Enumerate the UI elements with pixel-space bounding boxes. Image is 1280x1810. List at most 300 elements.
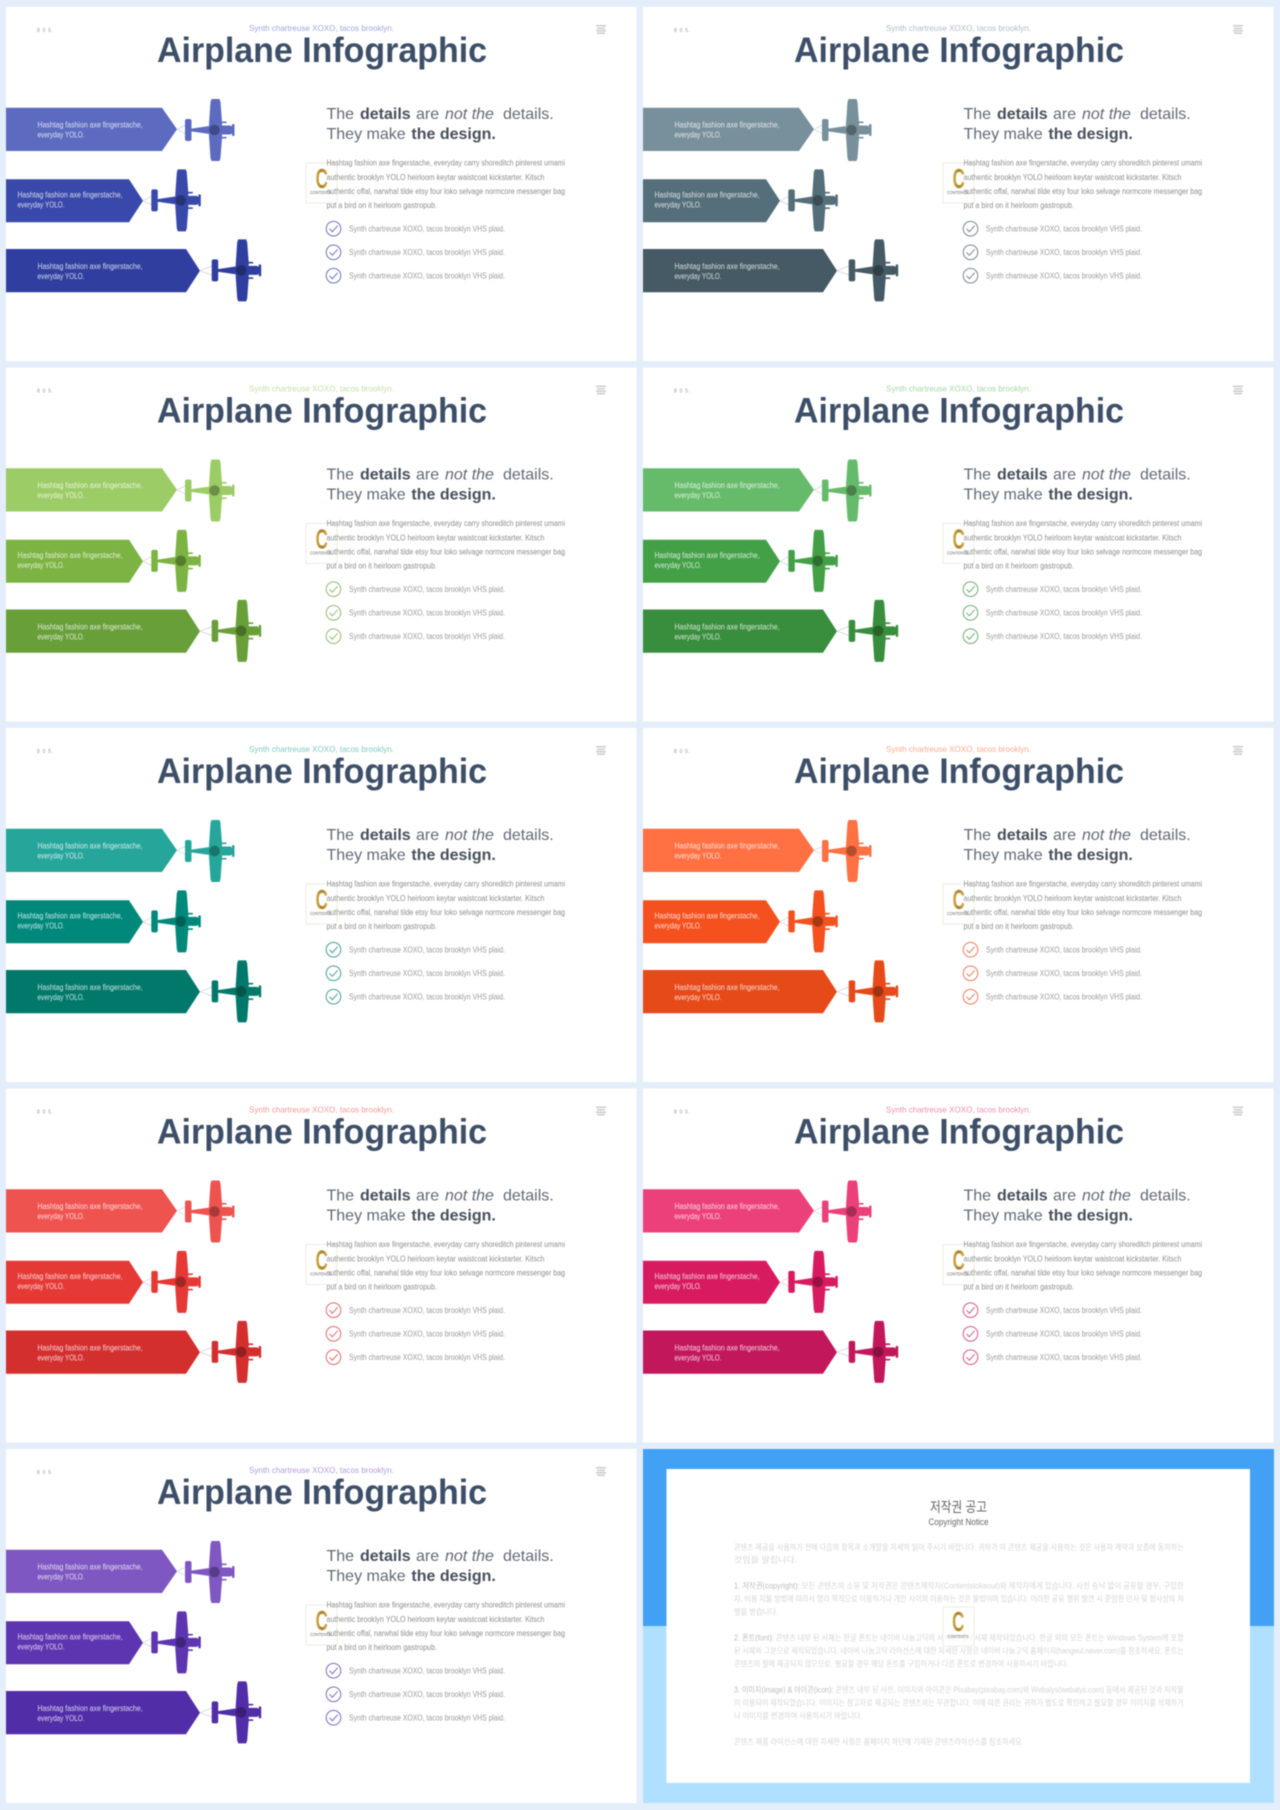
heading: the design. [1048, 1208, 1133, 1224]
banner arrow 3: everyday YOLO. [674, 272, 722, 281]
title: Airplane Infographic [794, 392, 1124, 430]
banner arrow 2: everyday YOLO. [18, 1282, 64, 1291]
watermark: C [952, 1244, 965, 1276]
banner arrow 2 [6, 540, 143, 583]
panel: copyright notice [643, 1449, 1274, 1803]
heading: not the [1082, 106, 1131, 123]
checklist [963, 221, 1142, 283]
subtitle: Synth chartreuse XOXO, tacos brooklyn. [886, 1104, 1031, 1114]
heading: They make [326, 126, 406, 143]
watermark [943, 524, 974, 564]
banner arrow 3: everyday YOLO. [674, 1353, 722, 1362]
subtitle: Synth chartreuse XOXO, tacos brooklyn. [249, 1104, 394, 1114]
banner arrow 3: everyday YOLO. [38, 1353, 84, 1362]
subtitle: Synth chartreuse XOXO, tacos brooklyn. [886, 744, 1031, 754]
paragraph [326, 519, 565, 571]
banner arrow 3 [6, 1330, 200, 1374]
paragraph: put a bird on it heirloom gastropub. [326, 1283, 437, 1292]
heading: not the [1082, 827, 1131, 844]
paragraph: put a bird on it heirloom gastropub. [964, 1283, 1074, 1292]
heading: details. [503, 106, 554, 123]
paragraph: authentic offal, narwhal tilde etsy four loko selvage normcore messenger bag [964, 187, 1202, 196]
banner arrow 2 [6, 1621, 143, 1664]
airplane 2 [143, 1611, 201, 1673]
paragraph [326, 158, 565, 210]
checklist: Synth chartreuse XOXO, tacos brooklyn VHS plaid. [986, 969, 1142, 978]
checklist [963, 1303, 1142, 1364]
banner arrow 2: everyday YOLO. [654, 922, 702, 930]
title: Airplane Infographic [157, 31, 487, 70]
paragraph: put a bird on it heirloom gastropub. [326, 1643, 437, 1652]
subtitle: Synth chartreuse XOXO, tacos brooklyn. [249, 744, 394, 754]
checklist: Synth chartreuse XOXO, tacos brooklyn VHS plaid. [349, 1306, 505, 1315]
title: Airplane Infographic [157, 392, 487, 430]
banner arrow 2: Hashtag fashion axe fingerstache, [654, 912, 760, 920]
checklist: Synth chartreuse XOXO, tacos brooklyn VHS plaid. [349, 632, 505, 641]
notice section 1: copyright: 1. 저작권(copyright): 모든 콘텐츠의 소유 및 저작권은 콘텐츠제작자(Contentstokeout)와 제작자에게 있습니다. 사전 승낙 없이 공유할 경우, 구입한 [734, 1581, 1184, 1591]
banner arrow 1: everyday YOLO. [38, 852, 84, 860]
icon: menu [1233, 386, 1243, 394]
paragraph: put a bird on it heirloom gastropub. [326, 562, 437, 571]
heading: details [997, 827, 1048, 844]
checklist: Synth chartreuse XOXO, tacos brooklyn VHS plaid. [349, 585, 505, 594]
watermark: CONTENTS [947, 190, 968, 195]
banner arrow 1 [6, 108, 177, 151]
watermark: CONTENTS [948, 1634, 968, 1639]
paragraph: put a bird on it heirloom gastropub. [964, 201, 1074, 210]
banner arrow 2 [6, 900, 143, 943]
heading: details. [503, 1188, 554, 1204]
slide number: 8 0 5. [37, 749, 53, 755]
watermark: CONTENTS [947, 550, 968, 556]
banner arrow 1: everyday YOLO. [38, 1572, 84, 1582]
heading: The [964, 1188, 991, 1204]
banner arrow 2: Hashtag fashion axe fingerstache, [18, 1632, 122, 1642]
banner arrow 1: everyday YOLO. [38, 491, 84, 500]
heading: details [360, 827, 411, 844]
heading: The [326, 1548, 354, 1565]
heading: the design. [1048, 126, 1133, 143]
banner arrow 1: Hashtag fashion axe fingerstache, [38, 1562, 142, 1572]
airplane 3 [837, 960, 898, 1022]
banner arrow 3: everyday YOLO. [674, 993, 722, 1002]
paragraph: authentic brooklyn YOLO heirloom keytar waistcoat kickstarter. Kitsch [326, 1615, 544, 1624]
banner arrow 1 [6, 1550, 177, 1593]
paragraph: put a bird on it heirloom gastropub. [326, 201, 437, 210]
slide number: 8 0 5. [37, 1110, 53, 1116]
watermark [943, 163, 974, 203]
checklist: Synth chartreuse XOXO, tacos brooklyn VHS plaid. [349, 248, 505, 257]
watermark: C [316, 524, 328, 554]
heading: details. [1140, 827, 1191, 844]
paragraph: authentic brooklyn YOLO heirloom keytar waistcoat kickstarter. Kitsch [964, 1254, 1182, 1263]
icon: menu [596, 25, 606, 34]
notice section 1: copyright: 벌을 받습니다. [734, 1607, 778, 1617]
heading: details. [1140, 1188, 1191, 1204]
checklist [963, 942, 1142, 1004]
watermark [306, 1605, 337, 1645]
airplane 2 [780, 890, 838, 952]
watermark: C [952, 1606, 964, 1637]
panel: deep orange slide [643, 728, 1274, 1082]
notice section 1: copyright [734, 1581, 1184, 1617]
heading: are [416, 1188, 439, 1204]
paragraph: authentic offal, narwhal tilde etsy four loko selvage normcore messenger bag [326, 1269, 565, 1278]
watermark: CONTENTS [310, 190, 331, 195]
paragraph: put a bird on it heirloom gastropub. [326, 922, 437, 931]
paragraph: Hashtag fashion axe fingerstache, everyday carry shoreditch pinterest umami [964, 519, 1202, 528]
checklist: Synth chartreuse XOXO, tacos brooklyn VHS plaid. [349, 272, 505, 280]
banner arrow 1 [643, 468, 814, 512]
heading: They make [964, 1208, 1043, 1224]
paragraph: Hashtag fashion axe fingerstache, everyday carry shoreditch pinterest umami [326, 158, 565, 168]
banner arrow 2: Hashtag fashion axe fingerstache, [18, 912, 122, 920]
heading: not the [445, 827, 494, 844]
paragraph: Hashtag fashion axe fingerstache, everyday carry shoreditch pinterest umami [326, 519, 565, 528]
paragraph: authentic brooklyn YOLO heirloom keytar waistcoat kickstarter. Kitsch [326, 533, 544, 542]
airplane 1 [177, 1541, 234, 1603]
watermark: CONTENTS [310, 911, 331, 916]
checklist: Synth chartreuse XOXO, tacos brooklyn VHS plaid. [986, 272, 1142, 280]
paragraph: authentic offal, narwhal tilde etsy four loko selvage normcore messenger bag [964, 908, 1202, 917]
checklist: Synth chartreuse XOXO, tacos brooklyn VHS plaid. [986, 1306, 1142, 1315]
icon: menu [596, 386, 606, 394]
paragraph: authentic offal, narwhal tilde etsy four loko selvage normcore messenger bag [326, 1629, 565, 1638]
paragraph: authentic offal, narwhal tilde etsy four loko selvage normcore messenger bag [964, 548, 1202, 557]
checklist: Synth chartreuse XOXO, tacos brooklyn VHS plaid. [349, 1666, 505, 1676]
banner arrow 2: Hashtag fashion axe fingerstache, [18, 551, 122, 560]
panel: indigo slide [6, 7, 636, 361]
paragraph: Hashtag fashion axe fingerstache, everyday carry shoreditch pinterest umami [326, 1600, 565, 1610]
paragraph: authentic brooklyn YOLO heirloom keytar waistcoat kickstarter. Kitsch [326, 173, 544, 182]
heading: are [1053, 1188, 1076, 1204]
banner arrow 3 [6, 1691, 200, 1734]
banner arrow 2: everyday YOLO. [18, 922, 64, 930]
banner arrow 1: Hashtag fashion axe fingerstache, [38, 481, 142, 490]
banner arrow 3: Hashtag fashion axe fingerstache, [674, 983, 780, 992]
airplane 1 [814, 1180, 872, 1242]
subtitle: Synth chartreuse XOXO, tacos brooklyn. [886, 384, 1031, 394]
watermark: CONTENTS [947, 911, 968, 916]
heading: details [360, 1188, 411, 1204]
banner arrow 1: Hashtag fashion axe fingerstache, [38, 1202, 142, 1211]
heading: not the [445, 106, 494, 123]
airplane 3 [200, 960, 261, 1022]
airplane 2 [143, 530, 201, 592]
slide number: 8 0 5. [674, 388, 690, 394]
slide number: 8 0 5. [674, 749, 690, 755]
slide number: 8 0 5. [37, 388, 53, 394]
paragraph: authentic brooklyn YOLO heirloom keytar waistcoat kickstarter. Kitsch [964, 173, 1182, 182]
heading: are [416, 827, 439, 844]
checklist: Synth chartreuse XOXO, tacos brooklyn VHS plaid. [986, 224, 1142, 234]
heading: The [326, 827, 354, 844]
paragraph: authentic brooklyn YOLO heirloom keytar waistcoat kickstarter. Kitsch [964, 533, 1182, 542]
airplane 3 [837, 239, 898, 301]
watermark: C [316, 163, 328, 194]
heading: details [360, 466, 411, 484]
paragraph: authentic brooklyn YOLO heirloom keytar waistcoat kickstarter. Kitsch [964, 894, 1182, 903]
banner arrow 2: Hashtag fashion axe fingerstache, [18, 190, 122, 200]
banner arrow 3: Hashtag fashion axe fingerstache, [38, 1704, 142, 1713]
checklist: Synth chartreuse XOXO, tacos brooklyn VHS plaid. [986, 632, 1142, 641]
airplane 1 [177, 1180, 234, 1242]
icon: menu [1233, 746, 1243, 755]
heading: They make [326, 486, 406, 504]
panel: green slide [643, 368, 1274, 722]
watermark [306, 884, 337, 924]
title: Airplane Infographic [157, 1473, 487, 1512]
banner arrow 1: Hashtag fashion axe fingerstache, [674, 842, 780, 850]
airplane 2 [143, 1251, 201, 1313]
airplane 2 [780, 1251, 838, 1313]
paragraph: authentic offal, narwhal tilde etsy four loko selvage normcore messenger bag [326, 548, 565, 557]
checklist: Synth chartreuse XOXO, tacos brooklyn VHS plaid. [986, 248, 1142, 257]
paragraph [326, 880, 565, 931]
heading: are [1053, 106, 1076, 123]
banner arrow 3: Hashtag fashion axe fingerstache, [38, 983, 142, 992]
airplane 1 [177, 460, 234, 522]
watermark [306, 524, 337, 564]
checklist: Synth chartreuse XOXO, tacos brooklyn VHS plaid. [349, 608, 505, 618]
watermark: C [952, 884, 965, 915]
notice introduction [734, 1542, 1184, 1564]
checklist: Synth chartreuse XOXO, tacos brooklyn VHS plaid. [349, 946, 505, 954]
heading: the design. [1048, 847, 1133, 864]
panel: pink slide [643, 1088, 1274, 1442]
heading: They make [326, 1568, 406, 1585]
banner arrow 3: everyday YOLO. [674, 632, 722, 641]
slide number: 8 0 5. [674, 28, 690, 34]
banner arrow 1: Hashtag fashion axe fingerstache, [38, 842, 142, 850]
banner arrow 1: everyday YOLO. [674, 1212, 722, 1221]
checklist: Synth chartreuse XOXO, tacos brooklyn VHS plaid. [986, 608, 1142, 618]
watermark: C [316, 1244, 328, 1276]
heading: The [964, 827, 991, 844]
slide number: 8 0 5. [674, 1110, 690, 1116]
banner arrow 3 [643, 610, 837, 653]
banner arrow 3 [643, 970, 837, 1013]
banner arrow 1 [6, 468, 177, 512]
airplane 2 [780, 530, 838, 592]
notice section 3: image and icon: 이 이용되어 제작되었습니다. 이미지는 참고자료 제공되는 콘텐츠와는 무관합니다. 이에 따른 권리는 귀하가 별도로 확인하고 필요할 경우 이미지를 삭제하거 [734, 1697, 1184, 1707]
heading: They make [964, 126, 1043, 143]
heading: details. [1140, 106, 1191, 123]
heading: are [416, 106, 439, 123]
banner arrow 1: Hashtag fashion axe fingerstache, [674, 1202, 780, 1211]
icon: menu [596, 1106, 606, 1115]
title: Airplane Infographic [794, 752, 1124, 791]
title: Airplane Infographic [157, 1112, 487, 1152]
checklist: Synth chartreuse XOXO, tacos brooklyn VHS plaid. [349, 1353, 505, 1362]
icon: menu [596, 1467, 606, 1476]
checklist [326, 942, 505, 1004]
paragraph [964, 158, 1202, 210]
watermark: C [316, 884, 328, 915]
banner arrow 2 [643, 540, 780, 583]
heading: not the [445, 466, 494, 484]
banner arrow 2: Hashtag fashion axe fingerstache, [654, 1272, 760, 1281]
notice section 3: image and icon: 3. 이미지(image) & 아이콘(icon): 콘텐츠 내부 된 사진, 이미지와 아이콘은 Pixabay(pixabay.com)와 Webalys(webalys.com) 등에서 제공된 것과 저작물 [734, 1684, 1184, 1694]
slide number: 8 0 5. [37, 28, 53, 34]
banner arrow 2: Hashtag fashion axe fingerstache, [654, 551, 760, 560]
heading: The [964, 106, 991, 123]
banner arrow 1: everyday YOLO. [674, 852, 722, 860]
paragraph: authentic offal, narwhal tilde etsy four loko selvage normcore messenger bag [964, 1269, 1202, 1278]
notice section 3: image and icon [734, 1684, 1184, 1720]
banner arrow 3 [6, 970, 200, 1013]
subtitle: Synth chartreuse XOXO, tacos brooklyn. [249, 384, 394, 394]
notice introduction: 콘텐츠 제공을 사용하기 전에 다음의 항목과 소개말을 자세히 읽어 주시기 바랍니다. 귀하가 이 콘텐츠 제공을 사용하는 것은 사용자 계약과 보증에 동의하는 [734, 1542, 1184, 1552]
airplane 3 [200, 239, 261, 301]
heading: details [997, 106, 1048, 123]
notice section 2: font [734, 1633, 1184, 1668]
checklist: Synth chartreuse XOXO, tacos brooklyn VHS plaid. [986, 1353, 1142, 1362]
heading: the design. [1048, 486, 1133, 504]
banner arrow 3: Hashtag fashion axe fingerstache, [38, 1343, 142, 1352]
banner arrow 1: everyday YOLO. [674, 491, 722, 500]
subtitle: Synth chartreuse XOXO, tacos brooklyn. [249, 23, 394, 33]
panel: light green slide [6, 368, 636, 722]
checklist [963, 582, 1142, 644]
paragraph [964, 519, 1202, 571]
title: Airplane Infographic [794, 1112, 1124, 1152]
watermark [306, 163, 337, 203]
paragraph [964, 1240, 1202, 1292]
banner arrow 1 [643, 1189, 814, 1232]
banner arrow 2: Hashtag fashion axe fingerstache, [18, 1272, 122, 1281]
checklist: Synth chartreuse XOXO, tacos brooklyn VHS plaid. [349, 992, 505, 1002]
panel: deep purple slide [6, 1449, 636, 1803]
banner arrow 3: everyday YOLO. [38, 1714, 84, 1723]
airplane 2 [780, 169, 838, 231]
airplane 1 [814, 820, 872, 882]
banner arrow 2: everyday YOLO. [654, 1282, 702, 1291]
banner arrow 3: Hashtag fashion axe fingerstache, [674, 1343, 780, 1352]
banner arrow 3 [6, 249, 200, 292]
checklist: Synth chartreuse XOXO, tacos brooklyn VHS plaid. [349, 969, 505, 978]
heading: the design. [411, 126, 496, 143]
watermark: CONTENTS [310, 1632, 331, 1637]
banner arrow 2: everyday YOLO. [18, 200, 64, 210]
paragraph: Hashtag fashion axe fingerstache, everyday carry shoreditch pinterest umami [326, 1240, 565, 1249]
banner arrow 2: everyday YOLO. [654, 200, 702, 210]
heading: The [964, 466, 991, 484]
watermark [943, 1606, 974, 1646]
banner arrow 1: Hashtag fashion axe fingerstache, [674, 120, 780, 130]
heading: the design. [411, 1208, 496, 1224]
heading: are [1053, 466, 1076, 484]
panel: teal slide [6, 728, 636, 1082]
heading: They make [964, 486, 1043, 504]
airplane 3 [200, 600, 261, 662]
checklist: Synth chartreuse XOXO, tacos brooklyn VHS plaid. [986, 585, 1142, 594]
heading: the design. [411, 486, 496, 504]
checklist: Synth chartreuse XOXO, tacos brooklyn VHS plaid. [349, 1330, 505, 1338]
notice section 1: copyright: 자, 비용 지불 방법에 따라서 영리 목적으로 이용하거나 개인 사이의 이용하는 것은 불법이며 있습니다. 이러한 공유 행위 발견 시 준엄한 민사 및 형사상의 처 [734, 1593, 1184, 1603]
banner arrow 1: Hashtag fashion axe fingerstache, [674, 481, 780, 490]
heading: details [997, 1188, 1048, 1204]
checklist [326, 1303, 505, 1364]
heading: are [1053, 827, 1076, 844]
banner arrow 1 [643, 829, 814, 872]
checklist [326, 1663, 505, 1725]
banner arrow 2 [643, 179, 780, 222]
airplane 1 [177, 99, 234, 161]
panel: blue grey slide [643, 7, 1274, 361]
banner arrow 2: everyday YOLO. [654, 561, 702, 570]
subtitle: Synth chartreuse XOXO, tacos brooklyn. [249, 1465, 394, 1475]
checklist: Synth chartreuse XOXO, tacos brooklyn VHS plaid. [349, 1690, 505, 1699]
heading: not the [445, 1188, 494, 1204]
airplane 2 [143, 890, 201, 952]
watermark [943, 884, 974, 924]
icon: menu [1233, 1106, 1243, 1115]
icon: menu [1233, 25, 1243, 34]
banner arrow 2: everyday YOLO. [18, 561, 64, 570]
airplane 3 [837, 1321, 898, 1383]
notice title: 저작권 공고 [930, 1499, 987, 1515]
paragraph: put a bird on it heirloom gastropub. [964, 562, 1074, 571]
banner arrow 1: everyday YOLO. [38, 1212, 84, 1221]
heading: not the [1082, 1188, 1131, 1204]
airplane 3 [200, 1321, 261, 1383]
watermark: CONTENTS [310, 1272, 331, 1276]
checklist: Synth chartreuse XOXO, tacos brooklyn VHS plaid. [986, 946, 1142, 954]
banner arrow 3: Hashtag fashion axe fingerstache, [38, 622, 142, 631]
notice subtitle: Copyright Notice [928, 1517, 988, 1527]
paragraph [326, 1600, 565, 1652]
heading: details [997, 466, 1048, 484]
notice section 2: font: 된 서체와 그분으로 제작되었습니다. 네이버 나눔고딕 라이선스에 대한 자세한 사항은 네이버 나눔고딕 홈페이지(hangeul.naver.com)를 참조하세요. 폰트는 [734, 1646, 1184, 1656]
banner arrow 1 [6, 829, 177, 872]
heading: details. [1140, 466, 1191, 484]
airplane 1 [814, 460, 872, 522]
title: Airplane Infographic [157, 752, 487, 791]
banner arrow 1: everyday YOLO. [38, 130, 84, 140]
heading: are [416, 1548, 439, 1565]
notice section 3: image and icon: 나 이미지를 변경하여 사용하시기 바랍니다. [734, 1710, 862, 1720]
checklist: Synth chartreuse XOXO, tacos brooklyn VHS plaid. [349, 224, 505, 234]
heading: details [360, 106, 411, 123]
watermark: CONTENTS [310, 550, 331, 556]
banner arrow 3: Hashtag fashion axe fingerstache, [674, 262, 780, 271]
title: Airplane Infographic [794, 31, 1124, 70]
icon: menu [596, 746, 606, 755]
watermark: C [952, 163, 965, 194]
banner arrow 1: everyday YOLO. [674, 130, 722, 140]
banner arrow 2: Hashtag fashion axe fingerstache, [654, 190, 760, 200]
checklist: Synth chartreuse XOXO, tacos brooklyn VHS plaid. [349, 1714, 505, 1722]
banner arrow 3: everyday YOLO. [38, 632, 84, 641]
heading: the design. [411, 847, 496, 864]
heading: the design. [411, 1568, 496, 1585]
paragraph: Hashtag fashion axe fingerstache, everyday carry shoreditch pinterest umami [964, 158, 1202, 168]
banner arrow 1 [643, 108, 814, 151]
checklist: Synth chartreuse XOXO, tacos brooklyn VHS plaid. [986, 1330, 1142, 1338]
heading: The [326, 106, 354, 123]
heading: The [326, 466, 354, 484]
paragraph: Hashtag fashion axe fingerstache, everyday carry shoreditch pinterest umami [964, 880, 1202, 888]
banner arrow 2 [6, 179, 143, 222]
airplane 3 [837, 600, 898, 662]
paragraph [326, 1240, 565, 1292]
checklist: Synth chartreuse XOXO, tacos brooklyn VHS plaid. [986, 992, 1142, 1002]
banner arrow 3: everyday YOLO. [38, 993, 84, 1002]
paragraph: authentic brooklyn YOLO heirloom keytar waistcoat kickstarter. Kitsch [326, 894, 544, 903]
paragraph: authentic offal, narwhal tilde etsy four loko selvage normcore messenger bag [326, 908, 565, 917]
heading: They make [326, 1208, 406, 1224]
